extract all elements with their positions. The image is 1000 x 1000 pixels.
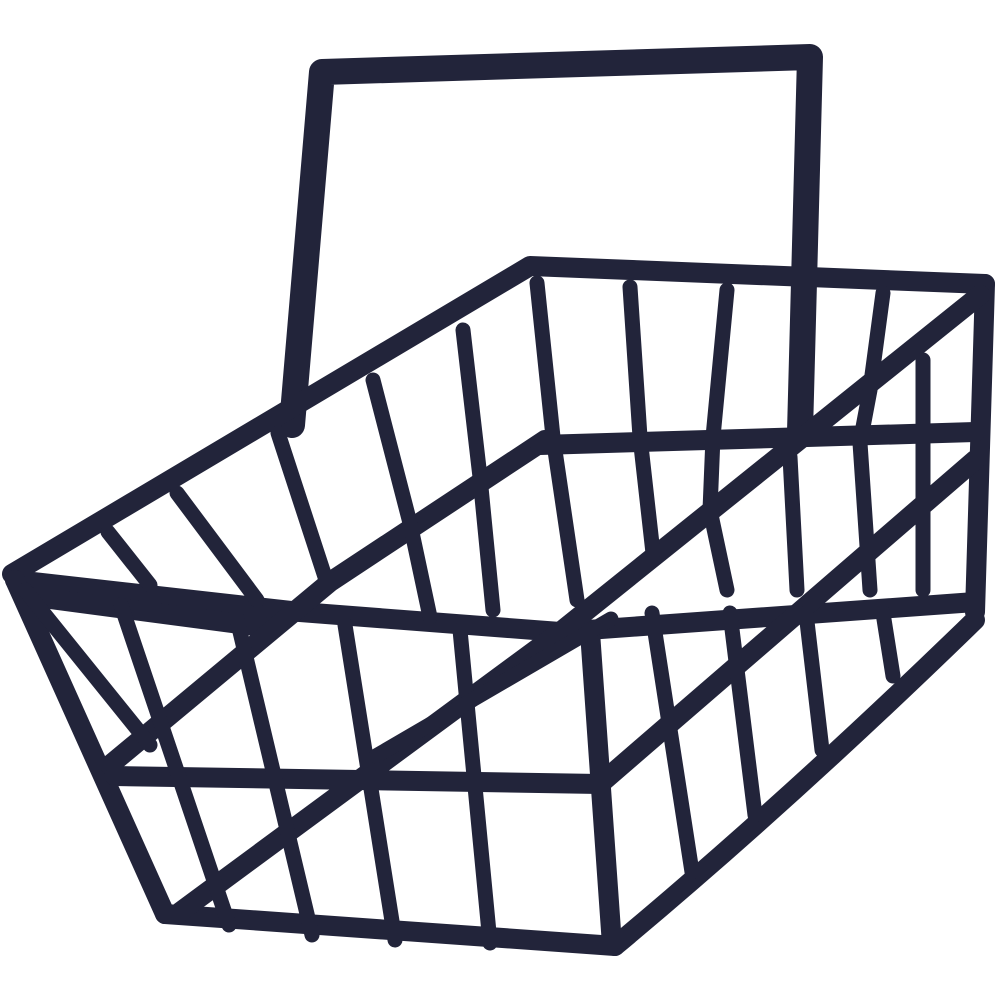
basket frame xyxy=(12,266,985,946)
basket handle xyxy=(292,57,810,432)
basket ribs xyxy=(25,283,923,943)
